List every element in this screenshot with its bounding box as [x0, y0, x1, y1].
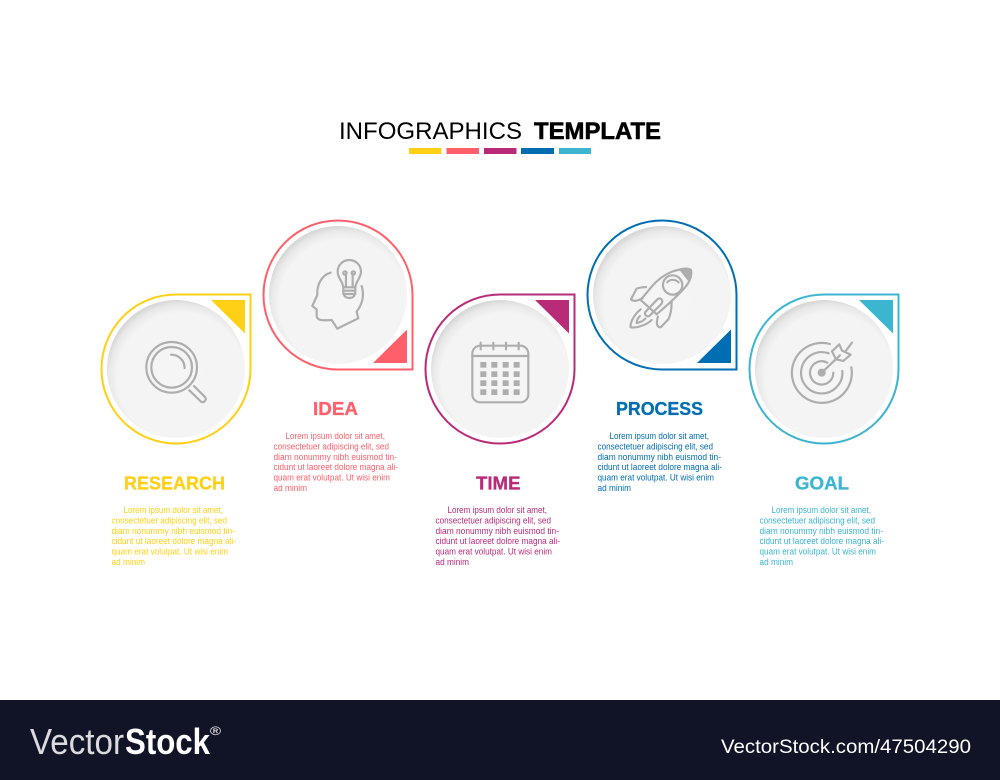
process inner circle [593, 226, 731, 364]
research heading: RESEARCH [124, 472, 225, 494]
footer image id: VectorStock.com/47504290 [721, 737, 971, 758]
icon: calendar [472, 343, 528, 402]
time text block: consectetuer adipiscing elit, sed [436, 515, 551, 525]
title colour bars [409, 148, 591, 154]
goal text block [760, 505, 884, 567]
goal text block: quam erat volutpat. Ut wisi enim [760, 547, 876, 557]
time text block: cidunt ut laoreet dolore magna ali- [436, 536, 560, 546]
process corner triangle [697, 330, 731, 363]
time text block [436, 505, 560, 567]
process text block: Lorem ipsum dolor sit amet, [610, 431, 709, 441]
idea badge outline [264, 220, 412, 370]
idea text block: ad minim [274, 483, 307, 493]
process text block: ad minim [598, 483, 631, 493]
footer logo: Stock [125, 721, 211, 762]
title [339, 118, 661, 145]
title: INFOGRAPHICS [339, 118, 522, 145]
process text block: consectetuer adipiscing elit, sed [598, 441, 713, 451]
idea text block: Lorem ipsum dolor sit amet, [286, 431, 385, 441]
process text block: diam nonummy nibh euismod tin- [598, 452, 721, 462]
panel: time [426, 294, 574, 567]
icon: rocket [631, 269, 691, 327]
footer logo: Vector [30, 721, 124, 762]
time corner triangle [535, 300, 569, 334]
research badge outline [101, 294, 250, 444]
time inner circle [431, 300, 569, 438]
footer logo [30, 721, 221, 762]
research text block: quam erat volutpat. Ut wisi enim [112, 547, 228, 557]
goal corner triangle [859, 300, 893, 334]
icon: target with arrow [792, 343, 852, 403]
idea text block: diam nonummy nibh euismod tin- [274, 452, 397, 462]
panel: idea [264, 220, 412, 493]
goal badge outline [750, 294, 898, 444]
idea inner circle [269, 226, 407, 364]
research text block: consectetuer adipiscing elit, sed [112, 515, 227, 525]
goal text block: Lorem ipsum dolor sit amet, [772, 505, 871, 515]
idea text block: cidunt ut laoreet dolore magna ali- [274, 462, 398, 472]
process badge outline [588, 220, 736, 370]
idea text block: consectetuer adipiscing elit, sed [274, 441, 389, 451]
time badge outline [426, 294, 574, 444]
goal text block: cidunt ut laoreet dolore magna ali- [760, 536, 884, 546]
goal text block: consectetuer adipiscing elit, sed [760, 515, 875, 525]
time text block: diam nonummy nibh euismod tin- [436, 526, 559, 536]
footer logo: ® [210, 724, 221, 738]
time text block: Lorem ipsum dolor sit amet, [448, 505, 547, 515]
research corner triangle [211, 300, 245, 334]
time heading: TIME [476, 472, 520, 494]
process heading: PROCESS [616, 398, 703, 419]
footer bar [0, 700, 1000, 780]
idea corner triangle [373, 330, 407, 363]
time text block: ad minim [436, 557, 469, 567]
icon: magnifying glass [146, 342, 206, 402]
research inner circle [107, 300, 245, 438]
idea text block: quam erat volutpat. Ut wisi enim [274, 473, 390, 483]
research text block: cidunt ut laoreet dolore magna ali- [112, 536, 236, 546]
process text block: quam erat volutpat. Ut wisi enim [598, 473, 714, 483]
idea heading: IDEA [313, 398, 358, 419]
goal text block: ad minim [760, 557, 793, 567]
goal heading: GOAL [795, 472, 849, 494]
time text block: quam erat volutpat. Ut wisi enim [436, 547, 552, 557]
research text block: diam nonummy nibh euismod tin- [112, 526, 235, 536]
goal inner circle [755, 300, 893, 438]
idea text block [274, 431, 398, 493]
icon: head with light bulb [312, 260, 363, 329]
panel: research [101, 294, 250, 567]
process text block [598, 431, 722, 493]
research text block [112, 505, 236, 567]
goal text block: diam nonummy nibh euismod tin- [760, 526, 883, 536]
process text block: cidunt ut laoreet dolore magna ali- [598, 462, 722, 472]
panel: goal [750, 294, 898, 567]
research text block: ad minim [112, 557, 145, 567]
panel: process [588, 220, 736, 493]
title: TEMPLATE [534, 118, 661, 145]
research text block: Lorem ipsum dolor sit amet, [124, 505, 223, 515]
